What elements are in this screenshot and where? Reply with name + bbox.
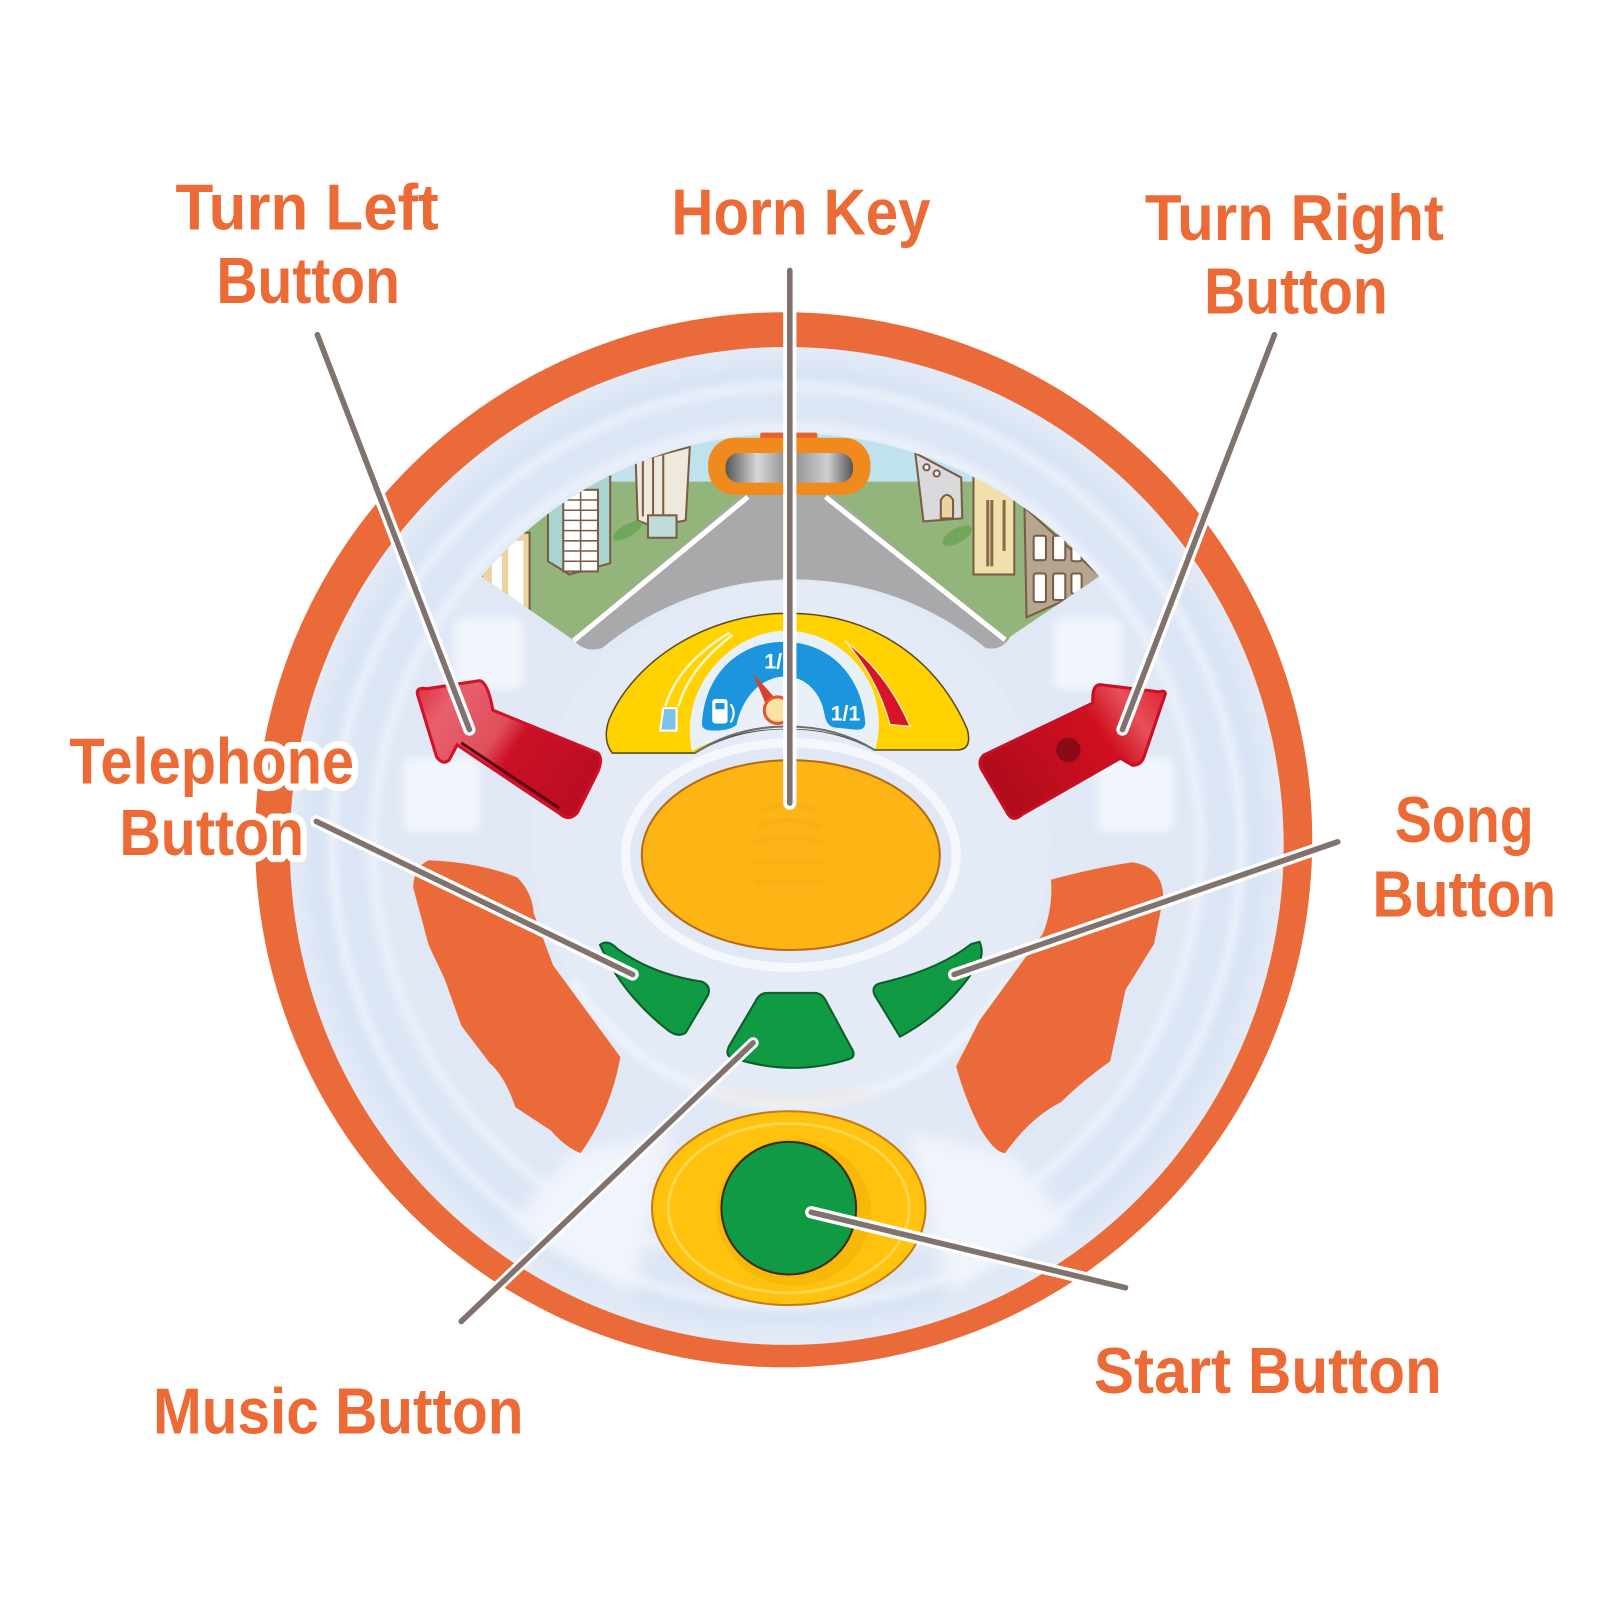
wheel body <box>290 347 1284 1345</box>
spoke highlights <box>403 617 1173 833</box>
leader line: horn <box>783 270 796 803</box>
song green button <box>873 942 982 1037</box>
label: turn right button <box>1145 181 1444 327</box>
label: telephone button: Telephone <box>69 725 354 798</box>
label: song button: Song <box>1395 783 1534 856</box>
needle hub <box>764 697 791 723</box>
leader line: start <box>811 1212 1126 1288</box>
left turn arrow <box>417 681 601 818</box>
green start cap <box>721 1142 856 1274</box>
label: turn right button: Button <box>1204 254 1388 327</box>
label: music button: Music Button <box>153 1375 523 1448</box>
right orange cut-out <box>956 862 1163 1153</box>
label: telephone button: Button <box>119 796 304 869</box>
label: telephone button: Telephone <box>69 725 354 798</box>
hub glow <box>714 1092 867 1102</box>
lower body highlights <box>510 1133 1071 1296</box>
rear-view mirror <box>708 433 870 495</box>
label: start button: Start Button <box>1094 1334 1442 1407</box>
blue gauge strip <box>660 708 677 731</box>
label: horn key: Horn Key <box>671 176 931 249</box>
right buildings <box>915 453 1106 617</box>
horn sound waves <box>753 805 824 883</box>
gauge values: 1/1 <box>831 701 860 725</box>
leader line: turn left <box>317 335 469 730</box>
red gauge strip <box>845 641 910 727</box>
road scene panel <box>482 434 1099 650</box>
left orange cut-out <box>413 860 620 1153</box>
label: telephone button <box>69 725 354 869</box>
grass <box>482 482 1099 650</box>
music green button <box>727 993 854 1068</box>
right turn arrow <box>980 685 1165 818</box>
lower hub ring <box>571 980 1010 1105</box>
gauge panel <box>606 613 969 753</box>
label: turn left button: Button <box>216 244 400 317</box>
needle <box>753 673 779 708</box>
rim highlights <box>333 387 1241 1305</box>
label: song button <box>1372 783 1556 930</box>
orange backing ring <box>255 312 1312 1367</box>
leader line: telephone <box>316 821 633 974</box>
road <box>556 495 1020 653</box>
gauge panel: 1/1 <box>764 649 794 673</box>
start button <box>652 1111 926 1305</box>
gauge lower edge <box>695 727 874 753</box>
road edge lines <box>573 497 1005 641</box>
label: turn left button <box>176 171 439 317</box>
leader line: turn right <box>1122 335 1274 730</box>
label: turn right button: Turn Right <box>1145 181 1444 254</box>
blue fuel arc <box>702 642 865 731</box>
inner light arch <box>690 631 879 751</box>
leader line: music <box>461 1043 753 1321</box>
bushes <box>613 520 972 546</box>
label: telephone button: Button <box>119 796 304 869</box>
fuel pump icon <box>712 699 734 723</box>
left buildings <box>482 447 690 624</box>
steering wheel infographic <box>70 182 1553 1434</box>
hub <box>532 582 1050 1105</box>
label: song button: Button <box>1372 857 1556 930</box>
telephone green button <box>600 943 709 1035</box>
yellow dash <box>606 613 969 753</box>
indicator dot <box>1056 738 1081 762</box>
horn key <box>642 760 940 950</box>
label: turn left button: Turn Left <box>176 171 439 244</box>
leader line: song <box>954 842 1338 974</box>
